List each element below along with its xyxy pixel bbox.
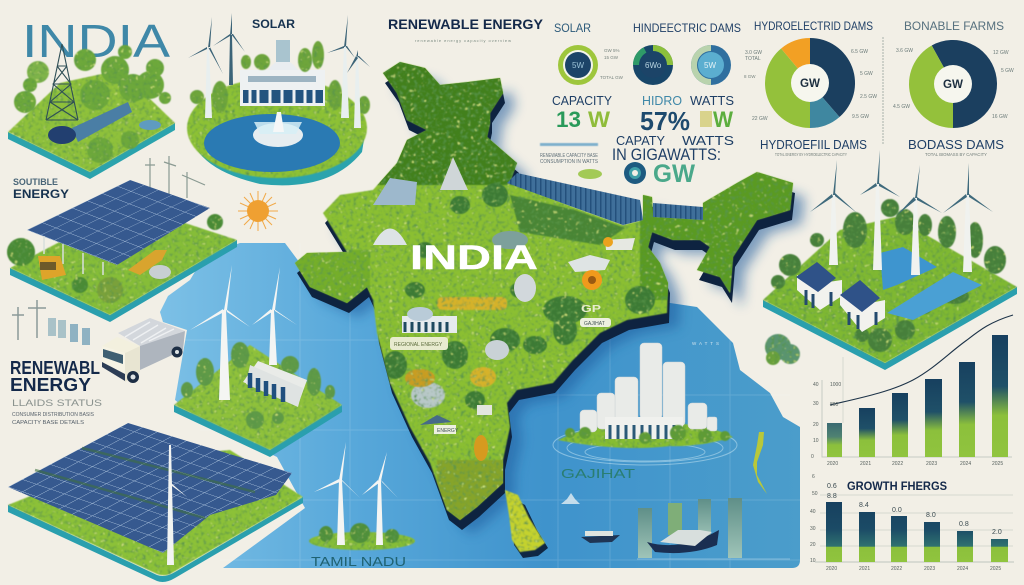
- value labels: 0.8: [959, 521, 969, 528]
- caption lines: [775, 152, 987, 157]
- chart axis: [637, 558, 790, 560]
- pie chart: hydro: GW: [800, 76, 821, 90]
- x labels: 2024: [960, 461, 971, 467]
- hydro watts: [642, 93, 734, 108]
- capaty watts: [616, 133, 734, 148]
- Andaman islands: [753, 432, 767, 494]
- small description: RENEWABLE CAPACITY BASE: [540, 153, 599, 159]
- trees: [771, 199, 1006, 352]
- label: sortable energy: SOUTIBLE: [13, 177, 58, 187]
- icon: truck: [102, 318, 185, 383]
- tiny annotations: 15 GW: [604, 55, 619, 60]
- solar array: [27, 180, 210, 265]
- heading: bonable farms: BONABLE FARMS: [904, 19, 1004, 33]
- y labels: 1000: [830, 382, 841, 388]
- GW ring: [624, 162, 646, 184]
- pond: [139, 120, 161, 130]
- yellow machine: [38, 256, 66, 280]
- value labels: [827, 483, 1002, 536]
- bar chart: growth energy: [810, 474, 1014, 572]
- heading: hydroelectrid dams: HYDROELECTRID DAMS: [754, 19, 873, 33]
- x labels: 2021: [860, 461, 871, 467]
- regional foliage: [290, 55, 800, 525]
- pie chart: biomass: GW: [943, 77, 964, 91]
- label: Gajihat: GAJIHAT: [561, 466, 635, 481]
- trees: [181, 342, 335, 429]
- axis labels: 2020: [826, 566, 837, 572]
- house 1: [796, 262, 842, 310]
- Nepal stripes: [507, 173, 643, 225]
- map title: INDIA: [410, 239, 538, 277]
- 13 W: 13: [556, 107, 581, 132]
- axis labels: 6: [812, 474, 815, 480]
- turbine: [167, 445, 187, 565]
- small flower: [603, 237, 613, 247]
- fountain: [253, 112, 303, 147]
- axis labels: 10: [810, 558, 816, 564]
- donut 3: 5W: [704, 61, 716, 70]
- house 2: [840, 280, 885, 332]
- y labels: 40: [813, 382, 819, 388]
- blades: [810, 150, 993, 215]
- small description: CONSUMPTION IN WATTS: [540, 159, 599, 165]
- ocean: [160, 243, 800, 568]
- map shadow: [307, 76, 805, 534]
- value labels: 2.0: [992, 529, 1002, 536]
- panel: wind and hydro farm: [763, 150, 1017, 370]
- W: [700, 107, 733, 132]
- capacity: CAPACITY: [552, 93, 612, 108]
- heading: hydroefiil dams: HYDROEFIIL DAMS: [760, 137, 867, 152]
- tiny annotations: GW 5%: [604, 48, 620, 53]
- trees: [319, 523, 399, 543]
- x labels: [827, 461, 1003, 467]
- row gaps: [35, 448, 255, 518]
- pie annotations: 22 GW: [752, 116, 768, 122]
- tiny caption: WATTS: [692, 341, 719, 346]
- value labels: 8.8: [827, 493, 837, 500]
- pylons: [145, 156, 205, 198]
- shrubs: [565, 425, 730, 444]
- 13 W: [556, 107, 610, 132]
- panel: solar pond with palace: [187, 13, 370, 185]
- heading: hindeectric dams: HINDEECTRIC DAMS: [633, 21, 741, 35]
- hydro watts: WATTS: [690, 93, 734, 108]
- label: SOLAR: SOLAR: [252, 17, 295, 31]
- water ripples: [553, 425, 737, 465]
- tiny annotations: [600, 48, 756, 80]
- divider line: [882, 37, 884, 145]
- power house: [243, 361, 307, 407]
- y labels: 20: [813, 422, 819, 428]
- solar strip: [72, 102, 132, 142]
- panel: Tamil Nadu wind turbines: [309, 442, 415, 550]
- map extrusion: [297, 72, 795, 530]
- pie annotations: 5 GW: [1001, 68, 1014, 74]
- panel: Gajihat power towers: [553, 343, 737, 465]
- tiny annotations: 8 GW: [744, 74, 756, 79]
- map land: [295, 62, 793, 520]
- y labels: 10: [813, 438, 819, 444]
- lattice tower: [46, 44, 78, 120]
- trees: [7, 214, 223, 303]
- axis labels: 2021: [859, 566, 870, 572]
- donut 2: 6Wo: [645, 61, 662, 70]
- bar chart: capacity growth: [811, 315, 1013, 467]
- label: Tamil Nadu: TAMIL NADU: [311, 554, 406, 569]
- pie annotations: 4.5 GW: [893, 104, 910, 110]
- label: sortable energy: ENERGY: [13, 187, 69, 201]
- value labels: 0.0: [892, 507, 902, 514]
- domes and plants: [373, 157, 635, 425]
- axis labels: 2023: [924, 566, 935, 572]
- title: RENEWABLE ENERGY: RENEWABLE ENERGY: [388, 16, 544, 32]
- label: sortable energy: [13, 177, 69, 201]
- icon: sun: [238, 191, 278, 231]
- x labels: 2023: [926, 461, 937, 467]
- pie annotations: 6.5 GW: [851, 49, 868, 55]
- label: renewable energy: [10, 358, 102, 426]
- axis labels: [810, 474, 1001, 572]
- x labels: 2020: [827, 461, 838, 467]
- small progress bar: [540, 143, 598, 146]
- donut 3: [691, 45, 731, 85]
- Sri Lanka: [505, 490, 548, 558]
- small description: [540, 153, 599, 165]
- label: renewable energy: CAPACITY BASE DETAILS: [12, 420, 84, 426]
- x labels: 2025: [992, 461, 1003, 467]
- label: renewable energy: CONSUMER DISTRIBUTION BASIS: [12, 412, 94, 418]
- wind turbines: [188, 13, 370, 128]
- chart on ocean: [637, 498, 790, 559]
- axis labels: 2025: [990, 566, 1001, 572]
- donut 1: 5W: [572, 61, 584, 70]
- panels: [8, 423, 292, 553]
- cylinders: [580, 343, 717, 432]
- icon: ferry: [647, 530, 719, 553]
- bars: [827, 335, 1008, 457]
- pie annotations: [745, 49, 877, 122]
- map: India: [290, 55, 805, 534]
- trend line: [830, 315, 1013, 405]
- tree cluster: [765, 334, 800, 365]
- heading: solar: SOLAR: [554, 21, 591, 35]
- value labels: 0.6: [827, 483, 837, 490]
- palace: [240, 40, 325, 106]
- y labels: 800: [830, 402, 839, 408]
- building on map: [402, 307, 457, 333]
- 57 percent: 57%: [640, 106, 690, 136]
- machine: [48, 126, 76, 144]
- W: W: [713, 107, 733, 132]
- subtitle lines: renewable energy capacity overview: [415, 38, 511, 43]
- label: renewable energy: LLAIDS STATUS: [12, 398, 102, 408]
- axis labels: 20: [810, 542, 816, 548]
- map labels: ENERGY: [437, 428, 459, 434]
- y labels: 30: [813, 401, 819, 407]
- pie annotations: TOTAL: [745, 56, 761, 62]
- panel: wind turbines on island: [174, 265, 342, 457]
- pie annotations: 9.5 GW: [852, 114, 869, 120]
- y labels: 0: [811, 454, 814, 460]
- pie chart: hydro: [765, 38, 855, 128]
- turbines: [314, 442, 398, 545]
- flower: [582, 270, 602, 290]
- heading: bodass dams: BODASS DAMS: [908, 137, 1004, 152]
- icon: small boat: [581, 531, 620, 543]
- excavator: [128, 250, 171, 279]
- yellow flower bands: [405, 297, 507, 387]
- pie annotations: 2.5 GW: [860, 94, 877, 100]
- x labels: 2022: [892, 461, 903, 467]
- donut 1: [558, 45, 598, 85]
- island: [558, 423, 733, 448]
- pie annotations: 3.0 GW: [745, 50, 762, 56]
- supports: [44, 236, 103, 275]
- trees behind palace: [190, 41, 370, 114]
- title: INDIA: INDIA: [22, 15, 170, 67]
- value labels: 8.4: [859, 502, 869, 509]
- axis labels: 2024: [957, 566, 968, 572]
- pie annotations: [893, 48, 1014, 120]
- map labels: [390, 304, 611, 434]
- panel: small solar stat: [540, 21, 756, 188]
- capaty watts: WATTS: [682, 133, 734, 148]
- pie chart: biomass: [909, 40, 997, 128]
- plant hall: [605, 417, 683, 439]
- bars: [826, 502, 1008, 562]
- hydro watts: HIDRO: [642, 93, 682, 108]
- icon: harbour ship: [561, 493, 580, 504]
- label: renewable energy: RENEWABL: [10, 358, 100, 378]
- small island: [578, 169, 602, 179]
- scattered tree clusters: [383, 183, 655, 409]
- axis labels: 40: [810, 509, 816, 515]
- pylons and batteries: [12, 300, 90, 345]
- map labels: GP: [581, 304, 601, 315]
- heading: GROWTH FHERGS: [847, 481, 947, 493]
- foliage: [14, 45, 171, 163]
- axis labels: 2022: [891, 566, 902, 572]
- panel: wind tower platform: [8, 44, 175, 179]
- donut 2: [633, 45, 673, 85]
- orange marker spot: [474, 435, 488, 461]
- pie annotations: 3.6 GW: [896, 48, 913, 54]
- value labels: 8.0: [926, 512, 936, 519]
- capaty watts: CAPATY: [616, 133, 665, 148]
- GW: GW: [653, 160, 695, 188]
- pie annotations: 5 GW: [860, 71, 873, 77]
- in gigawatts: IN GIGAWATTS:: [612, 145, 721, 164]
- axis labels: 30: [810, 526, 816, 532]
- panel: solar farm: [7, 156, 237, 322]
- pie annotations: 12 GW: [993, 50, 1009, 56]
- caption lines: TOTAL ENERGY BY HYDROELECTRIC CAPACITY: [775, 152, 847, 157]
- panel: large solar array: [8, 423, 303, 582]
- axis labels: 50: [812, 491, 818, 497]
- turbines: [829, 184, 972, 275]
- map labels: GAJIHAT: [584, 321, 605, 327]
- Bhutan stripes: [653, 203, 703, 220]
- y labels: [811, 382, 841, 460]
- pond water: [204, 114, 340, 172]
- turbines: [190, 265, 297, 400]
- tiny annotations: TOTAL GW: [600, 75, 624, 80]
- pie annotations: 16 GW: [992, 114, 1008, 120]
- 13 W: W: [588, 107, 610, 132]
- map labels: REGIONAL ENERGY: [394, 342, 443, 348]
- ponds: [880, 247, 937, 290]
- caption lines: TOTAL BIOMASS BY CAPACITY: [925, 152, 987, 157]
- label: renewable energy: ENERGY: [10, 375, 91, 395]
